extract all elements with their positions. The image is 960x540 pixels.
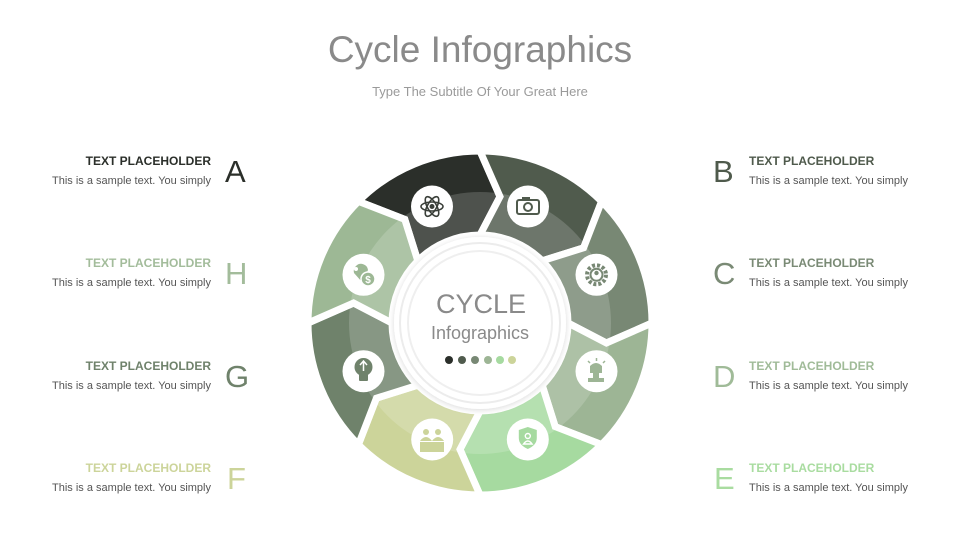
item F: TEXT PLACEHOLDER (86, 461, 211, 475)
segment H (308, 201, 418, 323)
item H (52, 256, 211, 289)
segment B (480, 151, 602, 261)
center title: CYCLE (436, 289, 526, 319)
icon A: atom (411, 186, 453, 228)
icon E: shield user (507, 418, 549, 460)
segment G (308, 303, 418, 445)
segment A (358, 151, 500, 261)
segment C (542, 201, 652, 343)
letter H: H (225, 256, 247, 291)
icon H: money pin: $ (365, 275, 371, 286)
item C: TEXT PLACEHOLDER (749, 256, 874, 270)
item A: TEXT PLACEHOLDER (86, 154, 211, 168)
letter F: F (227, 461, 246, 496)
item D (749, 359, 908, 392)
center circle (394, 237, 566, 409)
icon G: bulb gear (342, 350, 384, 392)
item F: This is a sample text. You simply (52, 482, 211, 494)
item A (52, 154, 211, 187)
item E (749, 461, 908, 494)
letter E: E (714, 461, 735, 496)
item B: This is a sample text. You simply (749, 175, 908, 187)
segment F (358, 385, 480, 495)
letter A: A (225, 154, 246, 189)
item C (749, 256, 908, 289)
segment D (542, 323, 652, 445)
icon D: idea fist (576, 350, 618, 392)
letter G: G (225, 359, 249, 394)
item D: This is a sample text. You simply (749, 380, 908, 392)
title: Cycle Infographics (328, 29, 632, 70)
item G: TEXT PLACEHOLDER (86, 359, 211, 373)
subtitle: Type The Subtitle Of Your Great Here (372, 84, 588, 99)
item G: This is a sample text. You simply (52, 380, 211, 392)
item A: This is a sample text. You simply (52, 175, 211, 187)
letter C: C (713, 256, 735, 291)
icon F: podium (411, 418, 453, 460)
icon H: money pin (342, 254, 384, 296)
color dots (445, 356, 516, 364)
center subtitle: Infographics (431, 323, 529, 343)
letter D: D (713, 359, 735, 394)
item D: TEXT PLACEHOLDER (749, 359, 874, 373)
item H: TEXT PLACEHOLDER (86, 256, 211, 270)
icon C: gear (576, 254, 618, 296)
item G (52, 359, 211, 392)
item B: TEXT PLACEHOLDER (749, 154, 874, 168)
item E: TEXT PLACEHOLDER (749, 461, 874, 475)
item H: This is a sample text. You simply (52, 277, 211, 289)
segment E (460, 385, 602, 495)
item C: This is a sample text. You simply (749, 277, 908, 289)
item B (749, 154, 908, 187)
item E: This is a sample text. You simply (749, 482, 908, 494)
icon B: camera (507, 186, 549, 228)
letter B: B (713, 154, 734, 189)
item F (52, 461, 211, 494)
